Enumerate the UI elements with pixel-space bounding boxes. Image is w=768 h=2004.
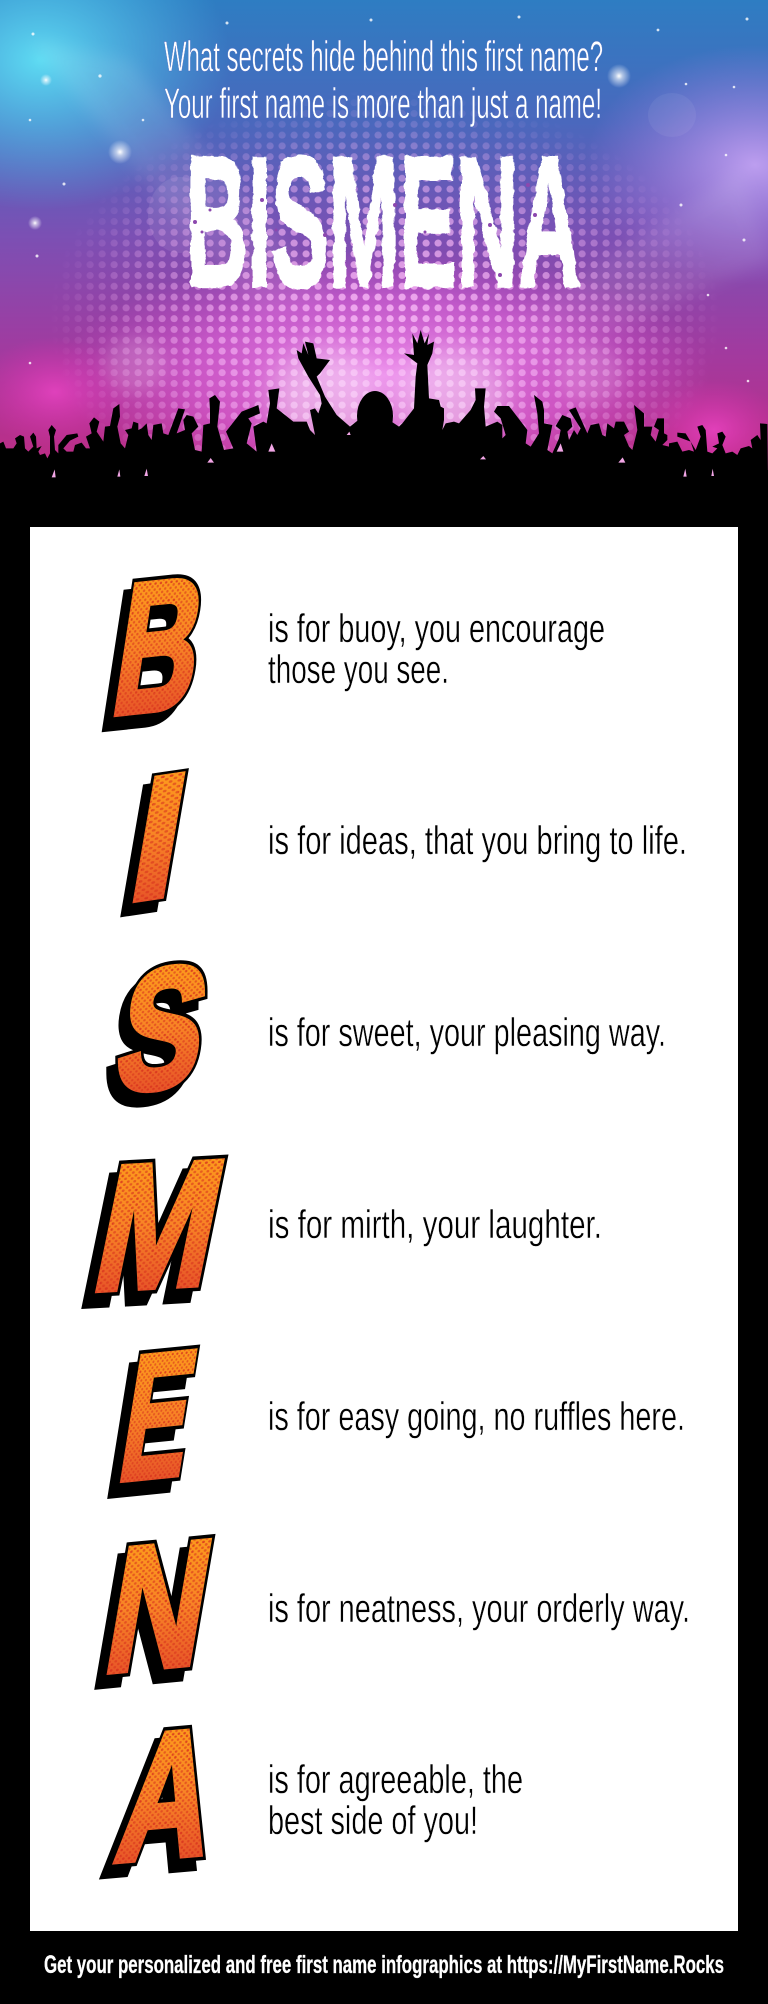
letter B: B: [93, 549, 208, 767]
text: A line: [268, 1758, 523, 1843]
letter M: M: [80, 1121, 240, 1329]
letter S: S: [97, 940, 211, 1140]
letter E: E: [109, 1313, 208, 1520]
left half of crowd: [0, 342, 384, 487]
letter E: E: [109, 1313, 208, 1520]
row: A: [98, 1691, 523, 1911]
letter N: N: [93, 1501, 225, 1712]
letter I: I: [115, 732, 203, 941]
right half of crowd: [384, 330, 768, 487]
letter B: B: [102, 538, 217, 756]
letter M: M: [80, 1121, 240, 1329]
letter S: S: [106, 929, 220, 1129]
letter S: S: [106, 929, 220, 1129]
text: B line: is for buoy, you encourage: [268, 607, 605, 651]
letter I: I: [106, 743, 194, 952]
row: S: [97, 929, 666, 1140]
letter B: B: [102, 538, 217, 756]
gaps between silhouettes: [52, 432, 768, 477]
letter N: N: [93, 1501, 225, 1712]
distressed name title: [186, 119, 580, 326]
text: B line: [268, 607, 605, 692]
letter A: A: [107, 1691, 228, 1900]
letter E: E: [109, 1313, 208, 1520]
text: B line: those you see.: [268, 648, 449, 692]
letter A: A: [98, 1702, 219, 1911]
header question text: [164, 33, 603, 128]
letter I: I: [115, 732, 203, 941]
central figure head: [357, 391, 393, 441]
row: M: [70, 1121, 602, 1341]
letter I: I: [115, 732, 203, 941]
header concert background: [0, 0, 768, 500]
letter M: M: [80, 1121, 240, 1329]
letter S: S: [106, 929, 220, 1129]
letter A: A: [107, 1691, 228, 1900]
letter A: A: [107, 1691, 228, 1900]
letter B: B: [102, 538, 217, 756]
row: N: [84, 1501, 690, 1723]
white content panel: [30, 527, 738, 1931]
letter N: N: [84, 1512, 216, 1723]
text: M line: is for mirth, your laughter.: [268, 1203, 602, 1247]
row: B: [93, 538, 605, 767]
letter E: E: [99, 1325, 198, 1532]
crowd silhouette: [0, 330, 768, 532]
letter N: N: [93, 1501, 225, 1712]
text: A line: best side of you!: [268, 1799, 478, 1843]
letter M: M: [70, 1133, 230, 1341]
row: I: [106, 732, 687, 952]
text: A line: is for agreeable, the: [268, 1758, 523, 1802]
row: E: [99, 1313, 685, 1532]
